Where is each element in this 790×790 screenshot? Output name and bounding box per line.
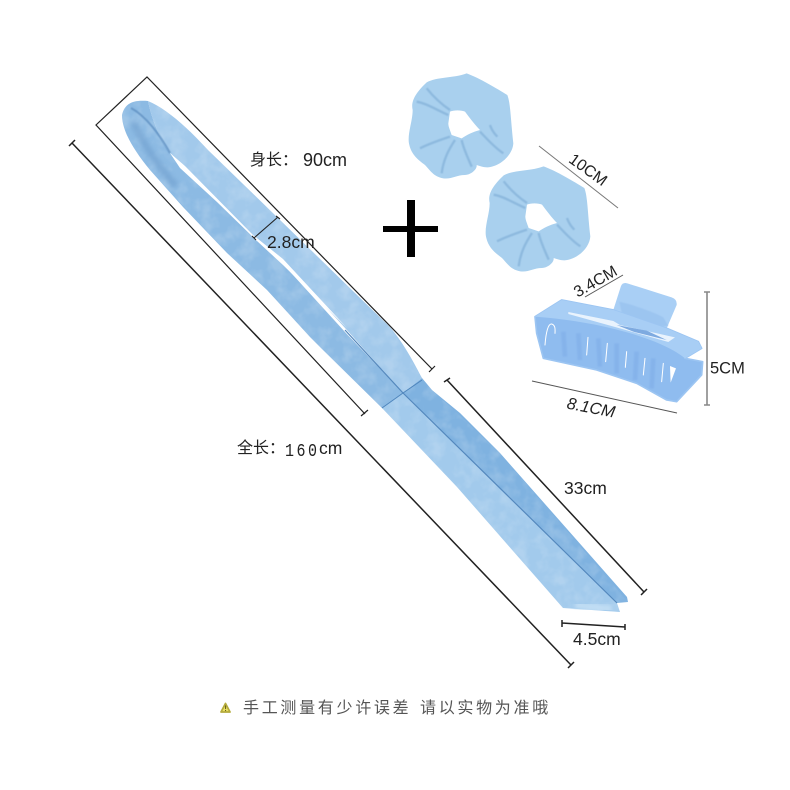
hair curler rod xyxy=(122,101,628,612)
clip slots xyxy=(545,324,663,382)
label: total length: cm xyxy=(319,438,342,458)
label: clip length: 8.1CM xyxy=(565,395,617,422)
clip dimension: width 3.4CM xyxy=(585,275,623,297)
label: body length xyxy=(250,150,347,170)
curler tail upper panel xyxy=(403,378,628,603)
curler centre seam xyxy=(345,330,617,603)
scrunchie one xyxy=(409,73,513,178)
curler velvet mottling xyxy=(122,101,628,612)
curler white gap xyxy=(170,153,347,328)
label: body length: 身长： xyxy=(250,151,298,169)
line: tube diameter 2.8cm xyxy=(252,216,280,240)
label: clip width: 3.4CM xyxy=(571,263,620,301)
clip handle xyxy=(613,283,677,328)
label: scrunchie size: 10CM xyxy=(565,151,610,190)
clip side opening xyxy=(670,366,676,383)
label: total length: 全长： xyxy=(237,439,285,457)
label: body length: 90cm xyxy=(303,150,347,170)
clip window xyxy=(568,312,675,342)
curler loop shadow xyxy=(133,122,176,186)
line: tip width 4.5cm xyxy=(562,620,625,630)
scrunchie two xyxy=(486,166,590,271)
plus sign xyxy=(383,200,438,257)
bracket: body length 90cm xyxy=(96,77,432,414)
curler loop fold xyxy=(131,108,170,153)
line: total length 160cm xyxy=(69,140,574,668)
curler lower strand xyxy=(122,101,403,408)
label: tail length: 33cm xyxy=(564,478,607,498)
label: tube diameter: 2.8cm xyxy=(267,232,315,252)
curler tip highlight xyxy=(575,605,612,609)
scrunchie one folds xyxy=(417,88,503,173)
clip dimension: length 8.1CM xyxy=(532,381,677,413)
footer note: 请以实物为准哦 xyxy=(420,699,551,717)
clip dimension: height 5CM xyxy=(704,292,710,405)
label: clip height: 5CM xyxy=(710,360,745,378)
label: total length xyxy=(237,438,342,463)
clip body xyxy=(535,300,703,402)
clip top face xyxy=(535,300,702,358)
hair claw clip xyxy=(535,283,703,402)
curler tail lower panel xyxy=(382,393,620,612)
clip teeth shading xyxy=(563,332,653,388)
scrunchie two folds xyxy=(494,181,580,266)
footer note xyxy=(243,699,551,717)
curler upper strand xyxy=(148,101,422,393)
footer note: 手工测量有少许误差 xyxy=(243,699,411,717)
label: total length: 160 xyxy=(285,442,317,463)
dimension lines for curler xyxy=(69,77,647,668)
icon: warning triangle xyxy=(221,704,230,712)
scrunchie dimension line xyxy=(539,146,618,208)
line: tail length 33cm xyxy=(444,378,647,595)
curler cross seam xyxy=(382,380,422,408)
label: tip width: 4.5cm xyxy=(573,629,621,649)
clip handle inner xyxy=(619,302,668,327)
